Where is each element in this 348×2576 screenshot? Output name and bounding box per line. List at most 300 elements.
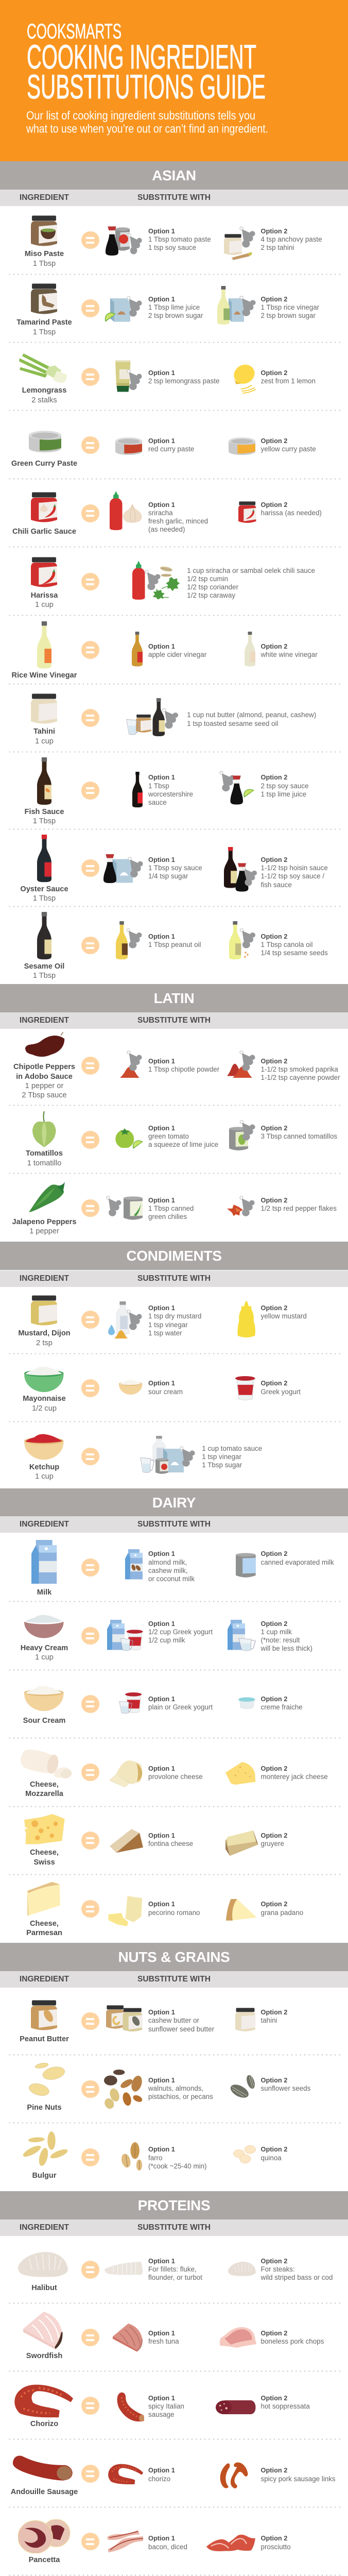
label: [0, 1394, 89, 1413]
icon: red curry can: [115, 437, 142, 455]
option 2 text: yellow curry paste: [260, 445, 316, 453]
label: Green Curry Paste: [11, 460, 77, 468]
option 2 text: [260, 227, 322, 251]
section header: Asian: ASIAN: [152, 167, 196, 183]
option 1 text: 1 Tbsp tomato paste: [148, 235, 211, 243]
label: Parmesan: [26, 1929, 62, 1937]
option 1 text: Option 1: [148, 1765, 175, 1772]
option 1 text: 2 tsp brown sugar: [148, 312, 203, 319]
option 2 text: [260, 773, 309, 799]
option 1 text: [148, 1695, 213, 1711]
icon: tomatillo: [32, 1111, 56, 1147]
substitution text: [187, 711, 316, 728]
icon: fontina wedge: [110, 1829, 143, 1853]
option 1 text: 1 Tbsp peanut oil: [148, 941, 201, 948]
option 1 text: [148, 2534, 187, 2551]
equals sign: [81, 1448, 99, 1465]
row: Pine Nuts: [0, 2055, 348, 2123]
equals sign: [81, 641, 99, 658]
label: [0, 590, 89, 609]
icon: cup, yogurt: [119, 1692, 142, 1714]
icon: nut butter, sesame oil, cup, spoons: [126, 698, 178, 736]
icon: milk carton, cup, yogurt: [107, 1620, 143, 1651]
option 1 text: [148, 773, 193, 807]
option 1 text: [148, 437, 194, 453]
section header: Nuts & Grains: NUTS & GRAINS: [118, 1949, 230, 1965]
row: Bulgur: [0, 2123, 348, 2191]
substitution text: 1 cup nut butter (almond, peanut, cashew): [187, 711, 316, 719]
column headings: [0, 1012, 348, 1029]
row: Fish Sauce: [0, 756, 348, 824]
option 1 text: [148, 1379, 183, 1396]
option 1 text: red curry paste: [148, 445, 194, 453]
icon: soppressata: [216, 2400, 255, 2414]
icon: andouille: [13, 2455, 72, 2481]
row: Sesame Oil: [0, 911, 348, 979]
option 2 text: Option 2: [260, 1057, 287, 1065]
row: Tahini: [0, 684, 348, 752]
label: [0, 1062, 89, 1100]
icon: lemongrass: [19, 353, 67, 383]
option 1 text: [148, 2394, 184, 2419]
label: 1 cup: [35, 601, 54, 609]
option 1 text: provolone cheese: [148, 1773, 203, 1781]
equals sign: [81, 2012, 99, 2030]
option 1 text: Option 1: [148, 1900, 175, 1908]
option 1 text: 1 tsp water: [148, 1329, 182, 1337]
option 1 text: [148, 2076, 213, 2101]
option 1 text: Option 1: [148, 1304, 175, 1312]
label: Harissa: [31, 591, 58, 600]
row: Miso Paste: [25, 215, 322, 268]
option 1 text: or coconut milk: [148, 1575, 195, 1583]
label: Pancetta: [29, 2556, 60, 2564]
row: Sour Cream: [0, 1670, 348, 1738]
option 2 text: [260, 1695, 303, 1711]
option 2 text: [260, 2008, 287, 2025]
option 2 text: Greek yogurt: [260, 1388, 301, 1396]
label: [22, 386, 66, 404]
substitution text: 1 cup sriracha or sambal oelek chili sauce: [187, 567, 315, 574]
label: Fish Sauce: [24, 808, 64, 816]
option 1 text: Option 1: [148, 773, 175, 781]
label: 1 Tbsp: [33, 260, 56, 268]
icon: jalapeno: [29, 1182, 65, 1212]
option 1 text: [148, 856, 202, 881]
label: [0, 807, 89, 826]
option 1 text: Option 1: [148, 437, 175, 445]
icon: pancetta: [18, 2519, 71, 2553]
option 1 text: Option 1: [148, 1550, 175, 1557]
substitution text: 1 Tbsp sugar: [202, 1461, 242, 1469]
label: [0, 1848, 89, 1867]
row: Heavy Cream: [0, 1602, 348, 1670]
row: Ketchup: [0, 1422, 348, 1490]
label: [16, 318, 72, 336]
option 1 text: (*cook ~25-40 min): [148, 2162, 207, 2170]
equals sign: [81, 2148, 99, 2166]
option 1 text: [148, 2329, 179, 2346]
subtitle: what to use when you’re out or can’t find an ingredient.: [26, 122, 268, 135]
option 2 text: Option 2: [260, 1900, 287, 1908]
option 2 text: creme fraiche: [260, 1703, 303, 1711]
option 1 text: [148, 2466, 175, 2483]
label: Mayonnaise: [23, 1395, 66, 1403]
icon: chorizo: [108, 2463, 143, 2485]
label: 1 Tbsp: [33, 817, 56, 825]
option 2 text: [260, 933, 328, 958]
label: 1 cup: [35, 1472, 54, 1481]
option 2 text: [260, 1196, 337, 1213]
equals sign: [81, 1379, 99, 1397]
option 2 text: [260, 2534, 291, 2551]
substitution text: 1/2 tsp caraway: [187, 591, 235, 599]
icon: vinegar, cup, tomato can, sugar, spoons: [140, 1436, 195, 1474]
label: in Adobo Sauce: [16, 1073, 73, 1081]
option 1 text: [148, 642, 206, 659]
option 1 text: [148, 2008, 214, 2033]
row: Mayonnaise: [0, 1354, 348, 1422]
option 2 text: Option 2: [260, 1765, 287, 1772]
equals sign: [81, 2080, 99, 2098]
option 1 text: 2 tsp lemongrass paste: [148, 377, 219, 385]
option 2 text: [260, 1550, 334, 1567]
column headings: INGREDIENT: [20, 193, 69, 202]
option 2 text: boneless pork chops: [260, 2337, 324, 2345]
icon: harissa jar: [238, 501, 256, 523]
label: Mustard, Dijon: [18, 1329, 71, 1337]
option 2 text: 1/4 tsp sesame seeds: [260, 949, 328, 957]
label: Tomatillos: [26, 1149, 63, 1158]
label: Swiss: [33, 1858, 55, 1867]
icon: soy sauce, sugar, spoons: [103, 854, 143, 883]
option 2 text: [260, 2076, 310, 2093]
option 1 text: sauce: [148, 799, 167, 806]
substitution text: [202, 1445, 262, 1470]
icon: tamarind jar: [31, 283, 57, 314]
icon: pork chop: [220, 2327, 256, 2348]
logo: COOKSMARTS: [27, 20, 121, 43]
icon: lemongrass paste tube, spoons: [115, 360, 142, 392]
subtitle: [26, 109, 268, 135]
option 1 text: [148, 1124, 218, 1149]
option 2 text: 2 tsp soy sauce: [260, 782, 309, 790]
option 1 text: Option 1: [148, 1620, 175, 1628]
equals sign: [81, 1695, 99, 1713]
option 2 text: monterey jack cheese: [260, 1773, 328, 1781]
icon: prosciutto: [206, 2534, 255, 2552]
label: 2 tsp: [36, 1339, 53, 1347]
option 2 text: Option 2: [260, 2394, 287, 2402]
equals sign: [81, 1131, 99, 1149]
icon: monterey jack: [225, 1762, 255, 1785]
label: [0, 1329, 89, 1348]
option 2 text: Option 2: [260, 369, 287, 377]
icon: canola oil, spoons, sesame seeds: [229, 921, 255, 959]
icon: farro: [121, 2142, 143, 2171]
icon: pecorino romano: [107, 1896, 143, 1926]
option 2 text: Option 2: [260, 1124, 287, 1132]
option 2 text: [260, 501, 322, 517]
section header: Asian: [0, 161, 348, 190]
label: Sesame Oil: [24, 962, 64, 971]
option 2 text: [260, 2257, 333, 2282]
option 2 text: Option 2: [260, 933, 287, 940]
option 2 text: grana padano: [260, 1909, 303, 1917]
option 2 text: 1 Tbsp canola oil: [260, 941, 313, 948]
option 1 text: Option 1: [148, 369, 175, 377]
icon: gruyere block: [225, 1831, 258, 1856]
equals sign: [81, 231, 99, 249]
label: [0, 1643, 89, 1663]
row: Lemongrass: [19, 353, 316, 404]
icon: chipotle powder, spoons: [120, 1050, 142, 1078]
option 1 text: 1 tsp dry mustard: [148, 1312, 201, 1320]
label: Oyster Sauce: [20, 885, 68, 893]
substitution text: 1/2 tsp coriander: [187, 583, 238, 591]
equals sign: [81, 1900, 99, 1918]
icon: mozzarella: [21, 1750, 72, 1779]
option 2 text: yellow mustard: [260, 1312, 307, 1320]
option 2 text: Option 2: [260, 2076, 287, 2084]
column headings: [0, 1270, 348, 1287]
option 1 text: Option 1: [148, 2145, 175, 2153]
option 2 text: Option 2: [260, 1832, 287, 1839]
option 2 text: canned evaporated milk: [260, 1558, 334, 1566]
icon: bulgur grains: [23, 2131, 68, 2166]
row: Andouille Sausage: [0, 2439, 348, 2507]
option 2 text: Option 2: [260, 856, 287, 863]
icon: harissa jar: [31, 557, 57, 587]
icon: sriracha, spoons, seeds, herbs: [132, 561, 180, 600]
option 2 text: Option 2: [260, 2329, 287, 2337]
option 1 text: Option 1: [148, 227, 175, 235]
option 1 text: Option 1: [148, 1196, 175, 1204]
option 1 text: 1 Tbsp canned: [148, 1205, 194, 1212]
option 1 text: Option 1: [148, 2329, 175, 2337]
option 2 text: 1-1/2 tsp cayenne powder: [260, 1074, 340, 1081]
option 1 text: chorizo: [148, 2475, 170, 2483]
row: Milk: [0, 1533, 348, 1601]
row: Chili Garlic Sauce: [12, 491, 322, 536]
option 1 text: fontina cheese: [148, 1840, 193, 1848]
icon: creme fraiche pot: [238, 1697, 255, 1709]
label: Tamarind Paste: [16, 318, 72, 327]
column headings: SUBSTITUTE WITH: [137, 1016, 211, 1025]
icon: Greek yogurt: [235, 1376, 255, 1400]
option 1 text: green chilies: [148, 1213, 187, 1221]
option 1 text: 1 tsp soy sauce: [148, 244, 196, 251]
option 1 text: Option 1: [148, 2257, 175, 2265]
option 1 text: pecorino romano: [148, 1909, 200, 1917]
section header: Nuts & Grains: [0, 1943, 348, 1971]
option 1 text: 1 Tbsp chipotle powder: [148, 1065, 219, 1073]
label: Andouille Sausage: [11, 2488, 78, 2496]
option 1 text: Option 1: [148, 2534, 175, 2542]
option 1 text: [148, 369, 219, 385]
icon: mayonnaise bowl: [24, 1366, 64, 1392]
option 1 text: [148, 501, 208, 533]
icon: chili garlic jar: [31, 493, 57, 522]
label: [25, 250, 64, 268]
option 2 text: For steaks:: [260, 2265, 295, 2273]
section header: Latin: [0, 984, 348, 1012]
option 2 text: 1 Tbsp rice vinegar: [260, 303, 319, 311]
row: Jalapeno Peppers: [0, 1174, 348, 1242]
label: [0, 1780, 89, 1799]
equals sign: [81, 1311, 99, 1329]
option 2 text: 2 tsp brown sugar: [260, 312, 316, 319]
option 2 text: Option 2: [260, 1550, 287, 1557]
option 1 text: sunflower seed butter: [148, 2025, 214, 2033]
label: Halibut: [31, 2284, 57, 2292]
option 1 text: [148, 1765, 203, 1781]
icon: Italian sausage: [117, 2392, 144, 2422]
option 2 text: Option 2: [260, 2145, 287, 2153]
option 2 text: Option 2: [260, 1379, 287, 1387]
option 1 text: 1/4 tsp sugar: [148, 872, 188, 880]
icon: spoons, canned green chilies: [106, 1196, 143, 1220]
equals sign: [81, 2397, 99, 2414]
equals sign: [81, 1558, 99, 1577]
option 1 text: [148, 1620, 213, 1645]
option 2 text: Option 2: [260, 437, 287, 445]
option 2 text: fish sauce: [260, 881, 292, 888]
option 1 text: Option 1: [148, 501, 175, 509]
row: Oyster Sauce: [0, 834, 348, 902]
substitution text: 1 cup tomato sauce: [202, 1445, 262, 1452]
option 2 text: Option 2: [260, 1304, 287, 1312]
option 2 text: [260, 1304, 307, 1321]
option 1 text: pistachios, or pecans: [148, 2093, 213, 2100]
option 1 text: fresh garlic, minced: [148, 517, 208, 525]
icon: bacon: [107, 2530, 143, 2553]
option 2 text: white wine vinegar: [260, 651, 318, 658]
option 2 text: Option 2: [260, 295, 287, 303]
icon: oyster sauce bottle: [37, 835, 51, 883]
option 1 text: [148, 1900, 200, 1917]
column headings: [0, 1971, 348, 1988]
option 2 text: spicy pork sausage links: [260, 2475, 336, 2483]
option 2 text: 1-1/2 tsp hoisin sauce: [260, 864, 328, 872]
equals sign: [81, 1764, 99, 1781]
option 1 text: sriracha: [148, 509, 173, 517]
row: Cheese, Mozzarella: [0, 1738, 348, 1806]
icon: vinegar, sugar box, spoons: [217, 286, 255, 325]
section header: Proteins: PROTEINS: [138, 2197, 210, 2213]
option 1 text: farro: [148, 2154, 163, 2162]
option 2 text: [260, 295, 319, 319]
label: Chili Garlic Sauce: [12, 528, 76, 536]
icon: tahini jar: [235, 2008, 255, 2032]
label: 1 tomatillo: [27, 1159, 61, 1167]
option 2 text: [260, 1057, 340, 1082]
icon: mixed nuts: [104, 2070, 143, 2109]
option 2 text: gruyere: [260, 1840, 284, 1848]
label: Ketchup: [29, 1463, 59, 1471]
label: Lemongrass: [22, 386, 66, 395]
equals sign: [81, 937, 99, 954]
icon: apple cider vinegar: [132, 632, 143, 666]
icon: heavy cream bowl: [24, 1615, 64, 1638]
option 1 text: worcestershire: [148, 790, 193, 798]
icon: green tomato, lime: [115, 1128, 143, 1149]
option 1 text: Option 1: [148, 2394, 175, 2402]
icon: chorizo: [14, 2383, 73, 2418]
option 2 text: Option 2: [260, 1695, 287, 1703]
column headings: INGREDIENT: [20, 1520, 69, 1529]
icon: pine nuts: [29, 2063, 65, 2098]
option 1 text: green tomato: [148, 1132, 189, 1140]
equals sign: [81, 1057, 99, 1075]
option 2 text: Option 2: [260, 773, 287, 781]
label: Mozzarella: [25, 1790, 63, 1798]
option 1 text: plain or Greek yogurt: [148, 1703, 213, 1711]
label: Peanut Butter: [20, 2035, 69, 2043]
option 2 text: [260, 2466, 336, 2483]
option 2 text: Option 2: [260, 2466, 287, 2474]
option 2 text: 1-1/2 tsp soy sauce /: [260, 872, 324, 880]
label: Rice Wine Vinegar: [12, 671, 77, 680]
option 2 text: 1-1/2 tsp smoked paprika: [260, 1065, 338, 1073]
icon: chipotle pepper: [25, 1032, 64, 1058]
icon: evaporated milk can: [236, 1553, 255, 1578]
option 2 text: Option 2: [260, 501, 287, 509]
column headings: [0, 190, 348, 206]
header panel: [0, 0, 348, 161]
icon: almond milk carton: [125, 1549, 143, 1579]
option 1 text: almond milk,: [148, 1558, 187, 1566]
option 1 text: spicy Italian: [148, 2402, 184, 2410]
option 1 text: bacon, diced: [148, 2543, 187, 2551]
label: 1 pepper or: [25, 1082, 63, 1090]
section header: Dairy: DAIRY: [152, 1494, 196, 1511]
column headings: SUBSTITUTE WITH: [137, 1975, 211, 1984]
row: Mustard, Dijon: [0, 1285, 348, 1353]
icon: sour cream bowl: [24, 1686, 64, 1711]
equals sign: [81, 2533, 99, 2550]
row: Rice Wine Vinegar: [0, 616, 348, 684]
option 2 text: [260, 1124, 337, 1141]
option 1 text: [148, 1057, 219, 1074]
label: [0, 1217, 89, 1236]
option 1 text: Option 1: [148, 295, 175, 303]
option 2 text: (*note: result: [260, 1636, 300, 1644]
label: Miso Paste: [25, 250, 64, 258]
label: 1 pepper: [29, 1227, 59, 1235]
option 2 text: will be less thick): [260, 1645, 312, 1652]
icon: rice wine vinegar bottle: [37, 621, 51, 668]
equals sign: [81, 436, 99, 454]
icon: milk carton: [31, 1540, 57, 1584]
label: Sour Cream: [23, 1717, 65, 1725]
option 1 text: 1 Tbsp lime juice: [148, 303, 200, 311]
column headings: SUBSTITUTE WITH: [137, 1520, 211, 1529]
icon: vinegar, water drop, dry mustard, spoons: [108, 1301, 142, 1338]
column headings: INGREDIENT: [20, 1975, 69, 1984]
icon: miso jar: [31, 215, 57, 246]
label: Pine Nuts: [27, 2104, 62, 2112]
icon: peanut oil, spoons: [116, 921, 142, 959]
option 2 text: sunflower seeds: [260, 2084, 310, 2092]
label: Jalapeno Peppers: [12, 1218, 76, 1226]
option 2 text: [260, 2329, 324, 2346]
option 1 text: 1 tsp vinegar: [148, 1321, 188, 1329]
option 1 text: fresh tuna: [148, 2337, 179, 2345]
option 1 text: apple cider vinegar: [148, 651, 206, 658]
icon: paprika, cayenne, spoons: [227, 1050, 255, 1078]
option 1 text: flounder, or turbot: [148, 2274, 202, 2281]
